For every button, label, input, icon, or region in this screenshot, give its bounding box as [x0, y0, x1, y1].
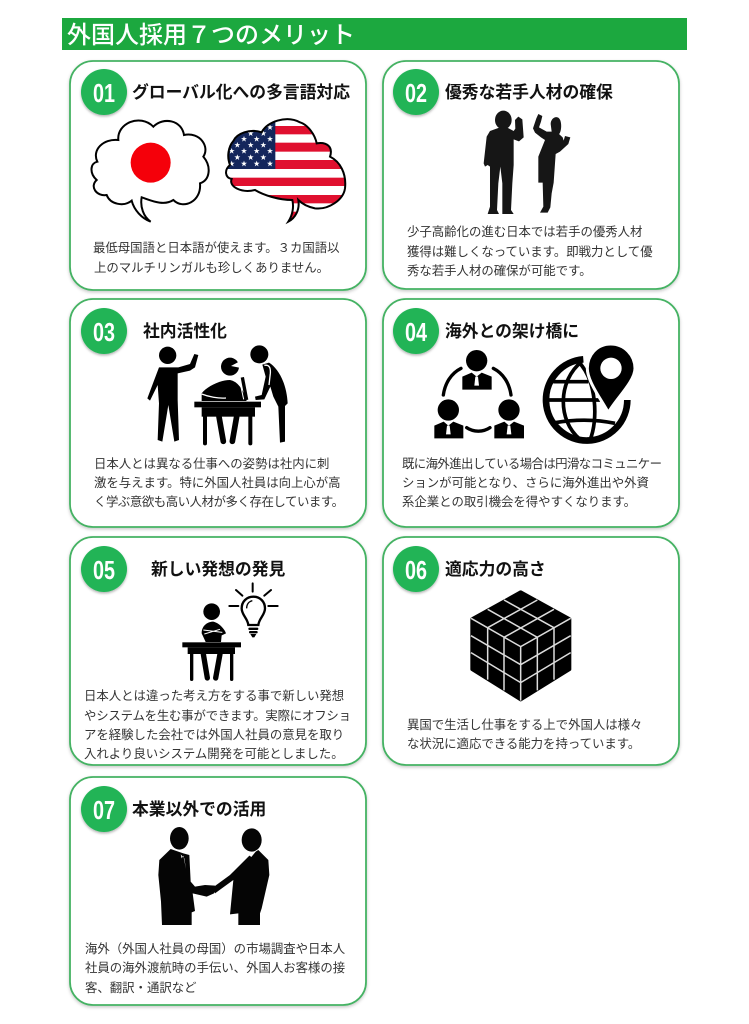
body text 02: 獲得は難しくなっています。即戦力として優: [407, 244, 653, 259]
body text 05: やシステムを生む事ができます。実際にオフショ: [84, 708, 351, 723]
icon: globe with map pin: [546, 344, 635, 441]
badge 07: [81, 786, 127, 832]
badge 07: 07: [93, 795, 115, 825]
body text 07: 社員の海外渡航時の手伝い、外国人お客様の接: [85, 960, 345, 975]
heading 02: 優秀な若手人材の確保: [445, 82, 613, 102]
body text 05: 入れより良いシステム開発を可能としました。: [84, 746, 344, 761]
body text 04: 既に海外進出している場合は円滑なコミュニケー: [402, 456, 662, 471]
body text 04: ションが可能となり、さらに海外進出や外資: [402, 475, 649, 490]
icon: person at desk with light bulb: [182, 583, 278, 679]
heading 06: 適応力の高さ: [445, 559, 546, 579]
badge 05: 05: [93, 555, 115, 585]
heading 03: 社内活性化: [143, 322, 227, 341]
body text 06: 異国で生活し仕事をする上で外国人は様々: [407, 717, 642, 732]
panel: 05 new ideas: [70, 537, 366, 765]
icon: three people at a desk: [147, 345, 288, 443]
badge 03: [81, 308, 127, 354]
heading 01: グローバル化への多言語対応: [132, 82, 350, 102]
icon: business people silhouettes: [484, 111, 570, 214]
body text 04: 系企業との取引機会を得やすくなります。: [402, 494, 636, 509]
badge 01: 01: [93, 78, 115, 108]
body text 03: く学ぶ意欲も高い人材が多く存在しています。: [94, 494, 344, 509]
icon: three business people network: [434, 350, 524, 438]
body text 03: [94, 456, 344, 509]
panel: 07 other uses: [70, 777, 366, 1005]
heading 04: 海外との架け橋に: [445, 322, 579, 341]
body text 01: 最低母国語と日本語が使えます。３カ国語以: [93, 240, 340, 255]
body text 06: [407, 717, 642, 751]
body text 01: [93, 240, 340, 275]
heading 05: 新しい発想の発見: [151, 560, 285, 579]
badge 04: [393, 308, 439, 354]
body text 06: な状況に適応できる能力を持っています。: [407, 736, 640, 751]
body text 07: 客、翻訳・通訳など: [85, 981, 197, 995]
badge 06: 06: [405, 555, 427, 585]
badge 02: [393, 69, 439, 115]
body text 04: [402, 456, 662, 509]
icon: puzzle cube: [471, 592, 571, 701]
badge 04: 04: [405, 317, 427, 347]
body text 01: 上のマルチリンガルも珍しくありません。: [94, 261, 329, 275]
icon: speech bubble with US flag: [220, 115, 350, 225]
body text 05: [84, 688, 351, 761]
panel: 01 multilingual: [70, 61, 366, 290]
badge 06: [393, 546, 439, 592]
body text 07: [85, 941, 346, 995]
badge 03: 03: [93, 317, 115, 347]
title banner: [62, 18, 687, 50]
heading 07: 本業以外での活用: [132, 800, 266, 819]
body text 05: アを経験した会社では外国人社員の意見を取り: [84, 727, 344, 742]
title banner: 外国人採用７つのメリット: [67, 22, 355, 49]
panel: 03 workplace activation: [70, 299, 366, 527]
badge 05: [81, 546, 127, 592]
icon: speech bubble with Japanese flag: [91, 120, 209, 222]
badge 01: [81, 69, 127, 115]
badge 02: 02: [405, 78, 427, 108]
body text 05: 日本人とは違った考え方をする事で新しい発想: [84, 688, 344, 703]
body text 07: 海外（外国人社員の母国）の市場調査や日本人: [85, 941, 346, 956]
body text 02: 秀な若手人材の確保が可能です。: [407, 263, 592, 278]
body text 02: 少子高齢化の進む日本では若手の優秀人材: [407, 224, 642, 239]
panel: 06 adaptability: [383, 537, 679, 765]
icon: handshake silhouettes: [158, 827, 269, 925]
body text 03: 日本人とは異なる仕事への姿勢は社内に刺: [94, 456, 329, 471]
body text 03: 激を与えます。特に外国人社員は向上心が高: [94, 475, 341, 490]
panel: 04 bridge overseas: [383, 299, 679, 527]
panel: 02 young talent: [383, 61, 679, 289]
body text 02: [407, 224, 653, 278]
